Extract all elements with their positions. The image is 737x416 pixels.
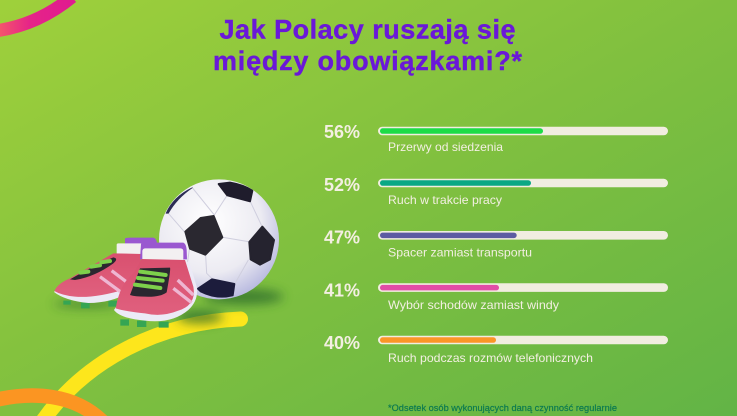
row: Wybór schodów zamiast windy 41% [324, 280, 668, 312]
row: Ruch w trakcie pracy 52%: Ruch w trakcie pracy [388, 193, 502, 207]
row: Spacer zamiast transportu 47%: Spacer zamiast transportu [388, 246, 532, 260]
decorative arc: pink [0, 0, 72, 31]
icon: front boot [114, 243, 197, 328]
icon: back boot [54, 238, 157, 308]
decorative arc: orange [0, 396, 105, 416]
row: Ruch w trakcie pracy 52%: 52% [324, 175, 360, 195]
row: Spacer zamiast transportu 47%: 47% [324, 228, 360, 248]
title [213, 14, 522, 76]
row: Ruch podczas rozmów telefonicznych 40%: Ruch podczas rozmów telefonicznych [388, 351, 593, 365]
row: Spacer zamiast transportu 47% [324, 228, 668, 260]
illustration: football and boots [53, 179, 283, 328]
row: Ruch w trakcie pracy 52% [324, 175, 668, 207]
footnote: *Odsetek osób wykonujących daną czynność regularnie [388, 403, 617, 414]
row: Wybór schodów zamiast windy 41%: Wybór schodów zamiast windy [388, 298, 559, 312]
row: Wybór schodów zamiast windy 41%: 41% [324, 280, 360, 300]
icon: football [159, 179, 279, 299]
row: Przerwy od siedzenia 56% [324, 122, 668, 154]
ground shadow [53, 289, 283, 323]
row: Ruch podczas rozmów telefonicznych 40%: 40% [324, 333, 360, 353]
title: Jak Polacy ruszają się [220, 14, 516, 44]
row: Przerwy od siedzenia 56%: Przerwy od siedzenia [388, 140, 503, 154]
decorative arc: yellow [42, 319, 240, 416]
row: Ruch podczas rozmów telefonicznych 40% [324, 333, 668, 365]
title: między obowiązkami?* [213, 46, 522, 76]
row: Przerwy od siedzenia 56%: 56% [324, 122, 360, 142]
